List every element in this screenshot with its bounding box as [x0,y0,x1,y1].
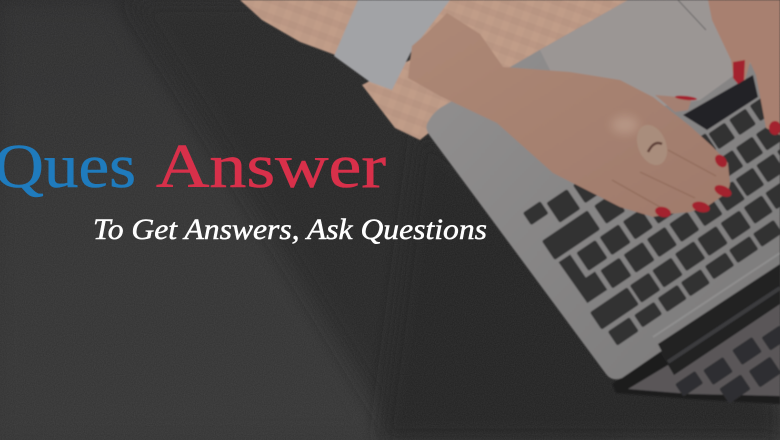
brand title [0,133,386,201]
title word: Answer: Answer [156,133,386,201]
right hand [708,0,780,135]
pinky finger behind hand [655,95,692,112]
key row 2 [589,181,780,330]
shirt cuff [334,0,450,90]
keyboard speaker strip [653,253,780,337]
photo: laptop and hands [240,0,780,404]
trackpad edge line [678,0,706,30]
arm and back of hand [408,13,730,217]
laptop body [426,0,780,379]
space bar [683,75,758,130]
key row 4 [576,121,780,271]
left hand [408,13,730,217]
laptop upper surface highlight [540,0,755,110]
nails: right hand [733,60,780,135]
keyboard keys [523,63,780,348]
key row 6 [523,167,607,237]
laptop screen and base shadow [612,262,780,404]
nails: left hand [654,95,733,219]
key row 5 with long key [542,91,777,260]
ring [631,120,673,170]
key row 3 [600,140,780,289]
shirt: plaid sleeve [240,0,630,140]
screen reflection keys [675,325,780,404]
hinge overlap [658,264,780,375]
finger separations [612,150,716,207]
tagline: To Get Answers, Ask Questions [93,213,487,246]
laptop hinge [656,262,780,375]
enter key [559,248,607,304]
back of hand highlight [611,116,639,134]
function row [608,220,780,346]
